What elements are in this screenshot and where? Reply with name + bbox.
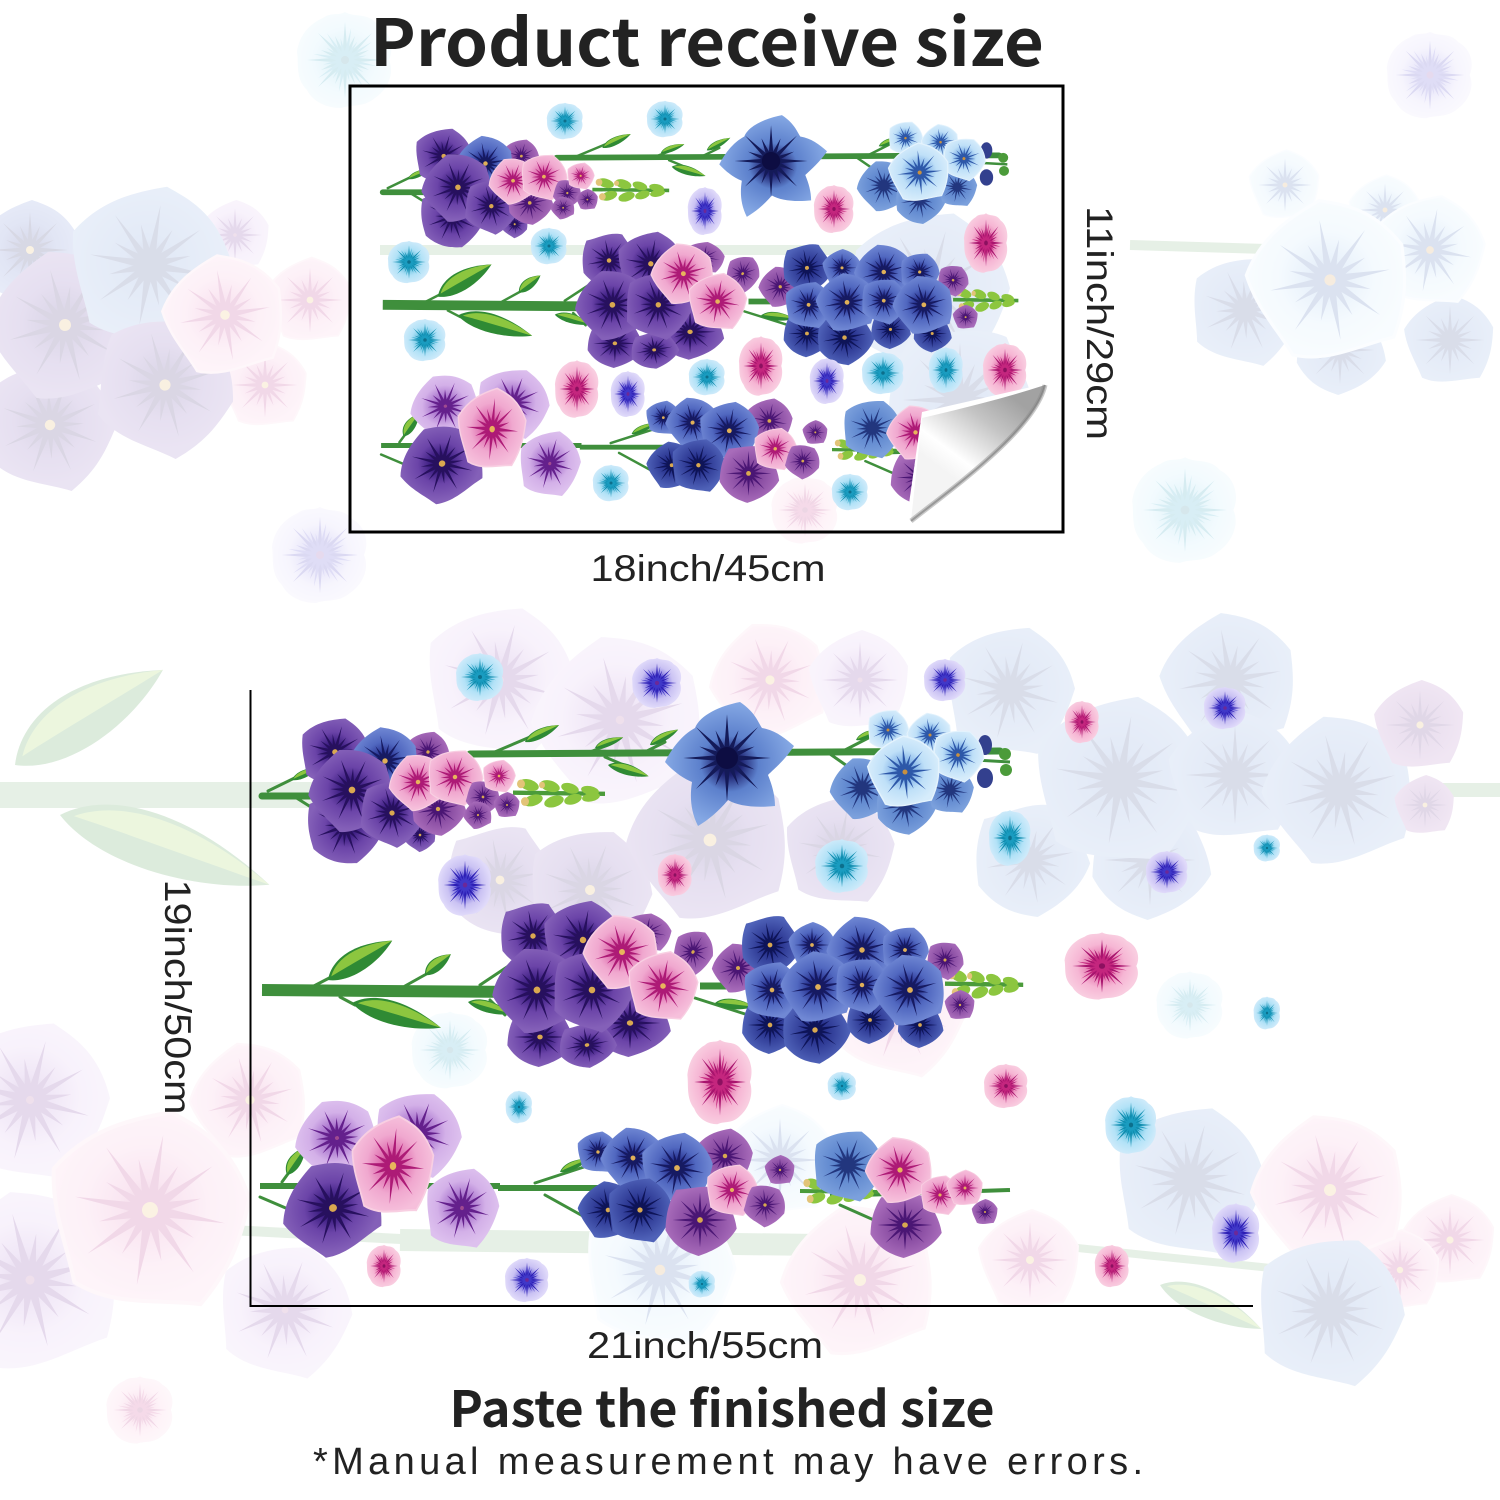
flower row 2 bottom [262, 894, 1023, 1072]
width label bottom: 21inch/55cm [587, 1325, 823, 1366]
scattered petals bottom [367, 653, 1280, 1302]
subtitle: Paste the finished size [450, 1370, 994, 1442]
height label bottom: 19inch/50cm [157, 879, 198, 1115]
flower row 2 top [383, 226, 1018, 372]
width label top: 18inch/45cm [590, 548, 826, 589]
flower row 3 bottom [260, 1078, 1010, 1271]
panel: product sheet [350, 86, 1063, 532]
frame [350, 86, 1063, 532]
peeling corner [905, 380, 1062, 532]
flower row 3 top [381, 357, 1007, 515]
flower row 1 bottom [262, 702, 1012, 875]
flower row 1 top [383, 115, 1009, 257]
axis lines [250, 690, 1253, 1306]
disclaimer: *Manual measurement may have errors. [313, 1441, 1143, 1483]
panel: finished layout [250, 653, 1280, 1306]
height label top: 11inch/29cm [1079, 206, 1120, 440]
scattered petals top [388, 101, 1026, 510]
